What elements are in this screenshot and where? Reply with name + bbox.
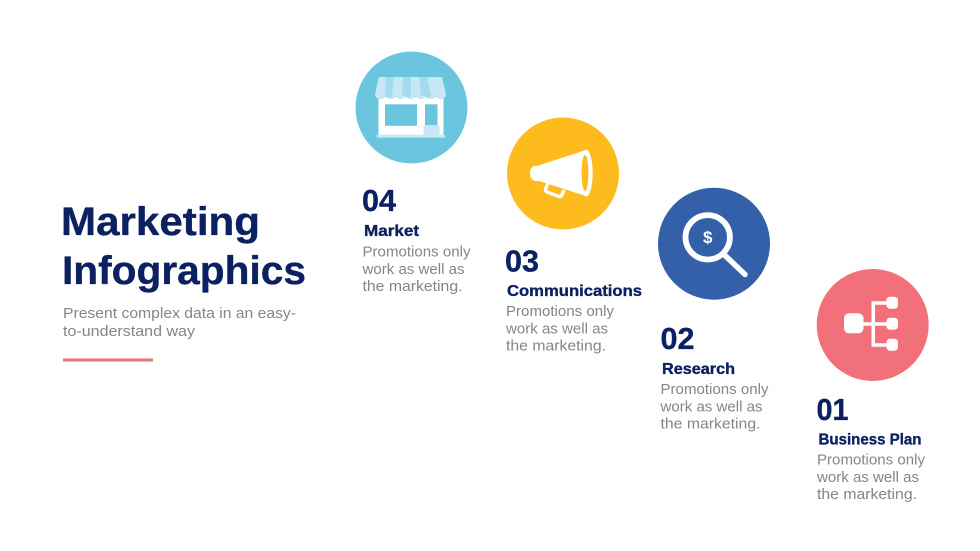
icon: magnifier with dollar: $ [703,228,713,247]
step 04: market [356,52,471,295]
title block [61,200,306,362]
step 02: research [658,188,770,432]
description [505,304,615,354]
title [61,200,306,293]
icon: megaphone [507,118,619,230]
description: work as well as [816,470,919,486]
description: work as well as [361,262,464,278]
icon: store [356,52,468,164]
heading: Communications: Communications [507,283,642,300]
description: the marketing. [506,338,606,354]
description: the marketing. [660,416,760,432]
icon: magnifier with dollar [658,188,770,300]
title: Marketing [61,200,260,244]
accent underline [63,358,153,362]
heading: Market: Market [364,223,420,240]
description: work as well as [659,400,762,416]
number 01: 01 [816,392,848,427]
step 03: communications [505,118,642,354]
heading: Business Plan: Business Plan [818,431,922,448]
description: the marketing. [362,279,462,295]
icon: hierarchy tree [817,269,929,381]
number 02: 02 [660,321,694,356]
number 03: 03 [505,244,539,278]
description: Promotions only [817,452,926,468]
description: Promotions only [660,382,769,398]
number 04: 04 [362,183,397,218]
title: Infographics [62,249,306,293]
description [361,244,471,295]
heading: Research: Research [662,361,735,378]
description [659,382,769,432]
description: Promotions only [506,304,615,320]
description: the marketing. [817,487,917,503]
description [816,452,926,503]
subtitle: Present complex data in an easy- [63,305,296,322]
subtitle [63,305,296,340]
description: Promotions only [362,244,471,260]
step 01: business plan [816,269,929,503]
description: work as well as [505,322,608,338]
subtitle: to-understand way [63,323,196,340]
